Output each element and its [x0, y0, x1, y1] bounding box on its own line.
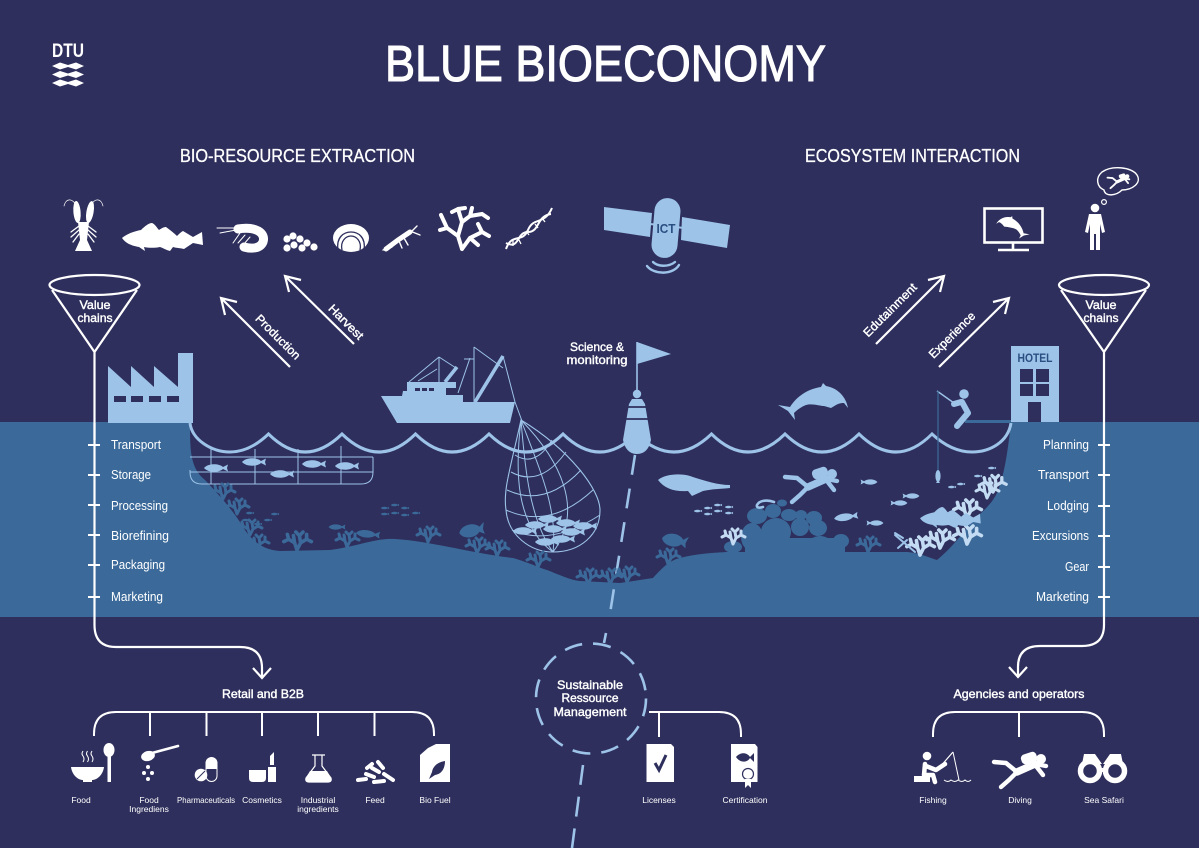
rocks [724, 500, 849, 554]
value chain list left: Processing [111, 499, 168, 513]
science and monitoring label [566, 340, 628, 367]
labels: retail products: Industrial [301, 795, 335, 805]
value chain list left: Biorefining [111, 529, 169, 543]
heading: bio-resource extraction: BIO-RESOURCE EXTRACTION [180, 146, 415, 166]
value chain list right: Marketing [1036, 590, 1089, 604]
icon: cosmetics [249, 752, 276, 782]
funnel right: value chains [1009, 275, 1149, 677]
title: BLUE BIOECONOMY [385, 35, 826, 92]
icon: bio fuel can [420, 744, 450, 782]
sustainable resource management circle: Management [554, 705, 627, 719]
labels: retail products: ingredients [297, 804, 339, 814]
corals in sea colour [212, 484, 880, 584]
hotel [1011, 346, 1059, 422]
labels: agencies: Sea Safari [1084, 795, 1124, 805]
hotel: HOTEL [1018, 351, 1052, 365]
labels: management [642, 795, 768, 805]
icon: shrimp [217, 228, 264, 248]
icon: binoculars [1080, 754, 1124, 780]
corals in light colour [722, 476, 1006, 555]
labels: agencies: Fishing [919, 795, 947, 805]
icon: dna [506, 208, 552, 249]
buoy with flag [623, 342, 671, 454]
labels: agencies [919, 795, 1124, 805]
science and monitoring label: monitoring [566, 353, 628, 367]
fish in light colour [694, 467, 996, 528]
icon: flask [306, 755, 331, 782]
sustainable resource management circle [536, 644, 646, 754]
seal [658, 474, 730, 496]
icon: certification [731, 744, 758, 788]
sea band [0, 422, 1199, 617]
icon: monitor with dolphin [984, 208, 1042, 250]
icon: person with thought bubble [1085, 168, 1138, 250]
science and monitoring label: Science & [570, 340, 624, 354]
value chain list right: Excursions [1032, 529, 1089, 543]
icon: lobster [64, 200, 103, 251]
funnel left: value chains [50, 275, 271, 678]
value chain list right [1032, 438, 1110, 604]
labels: retail products: Food [139, 795, 159, 805]
icon: seaweed [440, 208, 489, 249]
labels: retail products [71, 795, 451, 814]
value chain list left: Storage [111, 468, 151, 482]
arrow: edutainment [860, 276, 944, 344]
labels: management: Licenses [642, 795, 676, 805]
icon: feed pile [358, 762, 393, 782]
icon: cod [122, 223, 203, 251]
arrow: experience [926, 298, 1009, 367]
fish cage [190, 446, 373, 484]
funnel left: value chains: Value [80, 298, 111, 312]
icon: ICT satellite [604, 197, 730, 273]
logo: DTU [52, 41, 84, 86]
labels: retail products: Food [71, 795, 91, 805]
fishing boat [381, 347, 522, 423]
sustainable resource management circle: Ressource [562, 691, 619, 705]
arrow: harvest: Harvest [325, 301, 367, 343]
arrow: production [221, 298, 303, 367]
funnel right: value chains: chains [1084, 311, 1118, 325]
dark ocean basin [190, 422, 1011, 583]
icon: shell [333, 224, 369, 252]
icon: krill [383, 226, 420, 250]
labels: retail products: Ingrediens [129, 804, 169, 814]
wave line [190, 423, 1011, 452]
diver [785, 466, 837, 502]
value chain list left: Transport [111, 438, 161, 452]
icon: food [71, 743, 114, 782]
fish in sea colour [242, 504, 689, 549]
arrow: production: Production [253, 312, 303, 362]
heading: agencies and operators: Agencies and operators [954, 687, 1084, 701]
value chain list right: Transport [1038, 468, 1090, 482]
icon: diving [994, 751, 1046, 787]
sustainable resource management circle: Sustainable [557, 678, 623, 692]
value chain list right: Lodging [1047, 499, 1089, 513]
heading: ecosystem interaction: ECOSYSTEM INTERACTION [805, 146, 1020, 166]
value chain list left [88, 438, 169, 604]
icon: food ingredients [140, 746, 178, 781]
arrow: experience: Experience [926, 309, 978, 361]
factory [94, 353, 193, 440]
labels: agencies: Diving [1008, 795, 1032, 805]
bracket: agencies [933, 712, 1104, 737]
funnel right: value chains: Value [1086, 298, 1117, 312]
icon: ICT satellite: ICT [656, 221, 676, 236]
heading: retail and b2b: Retail and B2B [222, 687, 304, 701]
labels: retail products: Feed [365, 795, 385, 805]
fish net [505, 420, 600, 552]
dolphin [778, 383, 848, 420]
logo: DTU: DTU [52, 41, 84, 62]
icon: fishing [914, 752, 971, 782]
value chain list left: Marketing [111, 590, 163, 604]
bracket: licences [649, 712, 741, 737]
shrimp and lobster on seabed [757, 501, 915, 552]
icon: fish eggs [283, 232, 318, 252]
icon: license [646, 744, 674, 782]
funnel left: value chains: chains [78, 311, 112, 325]
dashed line lower [572, 633, 606, 848]
value chain list right: Planning [1043, 438, 1089, 452]
dashed monitoring line [609, 455, 635, 620]
labels: retail products: Pharmaceuticals [177, 795, 235, 805]
value chain list right: Gear [1065, 560, 1089, 574]
arrow: edutainment: Edutainment [860, 280, 920, 340]
fisherman on dock [935, 389, 1011, 483]
icon: pharmaceuticals [195, 758, 217, 782]
labels: management: Certification [723, 795, 768, 805]
labels: retail products: Bio Fuel [419, 795, 451, 805]
bracket: retail [94, 712, 434, 736]
labels: retail products: Cosmetics [242, 795, 282, 805]
arrow: harvest [285, 276, 367, 344]
value chain list left: Packaging [111, 558, 165, 572]
